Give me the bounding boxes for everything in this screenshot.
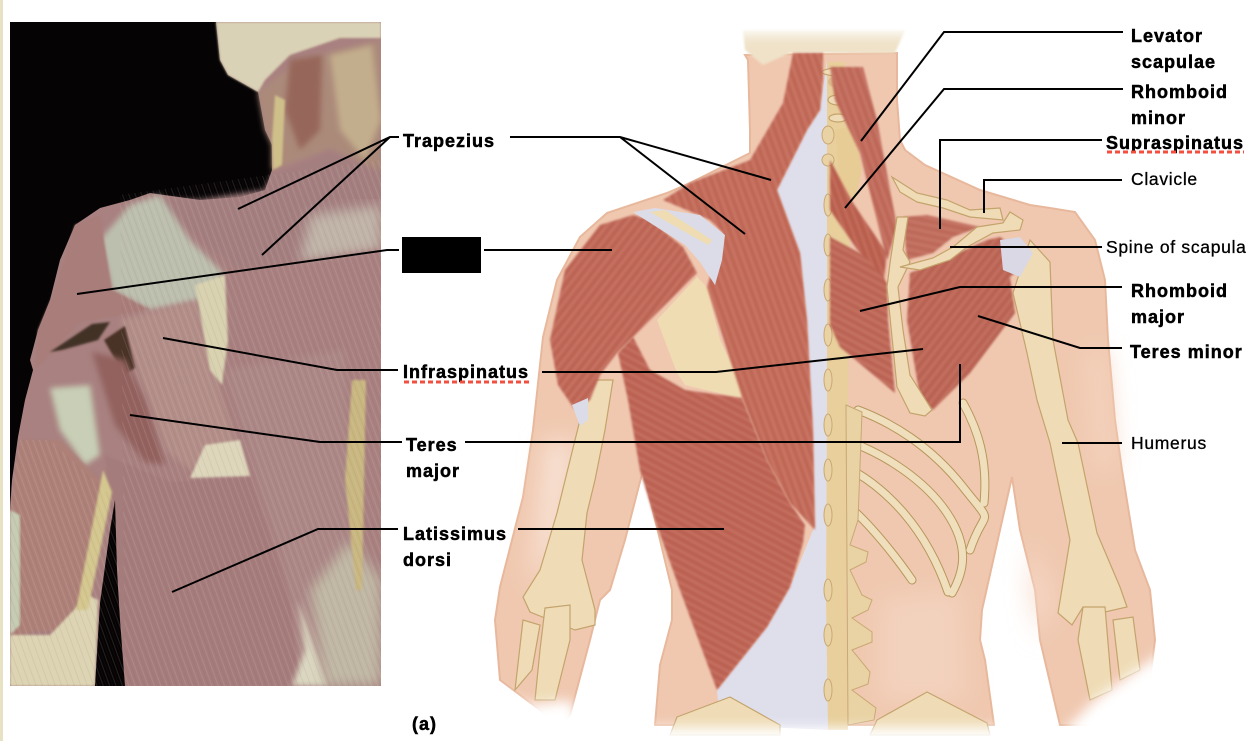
right humerus [1013,240,1127,625]
latissimus dorsi [618,337,805,690]
rhomboid minor [830,160,887,287]
redaction box [402,237,481,273]
label: Trapezius: Trapezius [403,131,495,151]
deltoid [550,215,697,410]
label: Latissimus dorsi: Latissimus [403,524,507,544]
scapula medial border [887,217,932,416]
label: Rhomboid minor: minor [1131,108,1186,128]
deltoid tendon [572,398,588,426]
thoracolumbar fascia [717,60,830,730]
acromion highlight [650,210,712,245]
scapula left bone [657,277,745,398]
right forearm bones [1078,607,1112,700]
infraspinatus and teres [907,237,1033,410]
right shoulder fascia [1000,237,1033,277]
label: Clavicle: Clavicle [1131,169,1198,189]
shoulder fascia [633,208,725,285]
panel: dissection photograph [10,22,381,686]
levator scapulae [830,67,897,260]
lower fade [480,14,1190,741]
label: Rhomboid major: major [1131,307,1185,327]
label: Rhomboid major: Rhomboid [1131,281,1228,301]
spine of scapula [900,212,1023,270]
pelvis left [670,697,780,735]
label: Supraspinatus: Supraspinatus [1106,133,1244,153]
leader lines: right labels [845,32,1123,443]
leader lines: left labels [77,137,960,592]
label: Humerus: Humerus [1131,433,1207,453]
label: Levator scapulae: Levator [1131,26,1203,46]
label: Teres major: Teres [406,435,458,455]
label: Spine of scapula: Spine of scapula [1106,237,1247,257]
skin highlights [530,350,1115,700]
trapezius [663,53,823,530]
pelvis right [870,692,990,735]
label: Teres major: major [406,461,460,481]
label: Levator scapulae: scapulae [1131,52,1216,72]
illustration: anatomical back figure [480,14,1190,741]
supraspinatus [903,215,980,260]
spine [822,62,876,730]
label: Rhomboid minor: Rhomboid [1131,82,1228,102]
left humerus [523,380,613,630]
label: Latissimus dorsi: dorsi [403,550,452,570]
clavicle [892,177,1003,220]
left forearm bones [535,605,570,700]
label: Infraspinatus: Infraspinatus [403,362,529,382]
ribs [853,403,985,593]
head base [743,30,905,65]
rhomboid major [830,237,895,393]
page edge strip [0,0,3,741]
caption: (a): (a) [412,714,437,734]
label: Teres minor: Teres minor [1130,342,1243,362]
body skin [495,53,1155,725]
